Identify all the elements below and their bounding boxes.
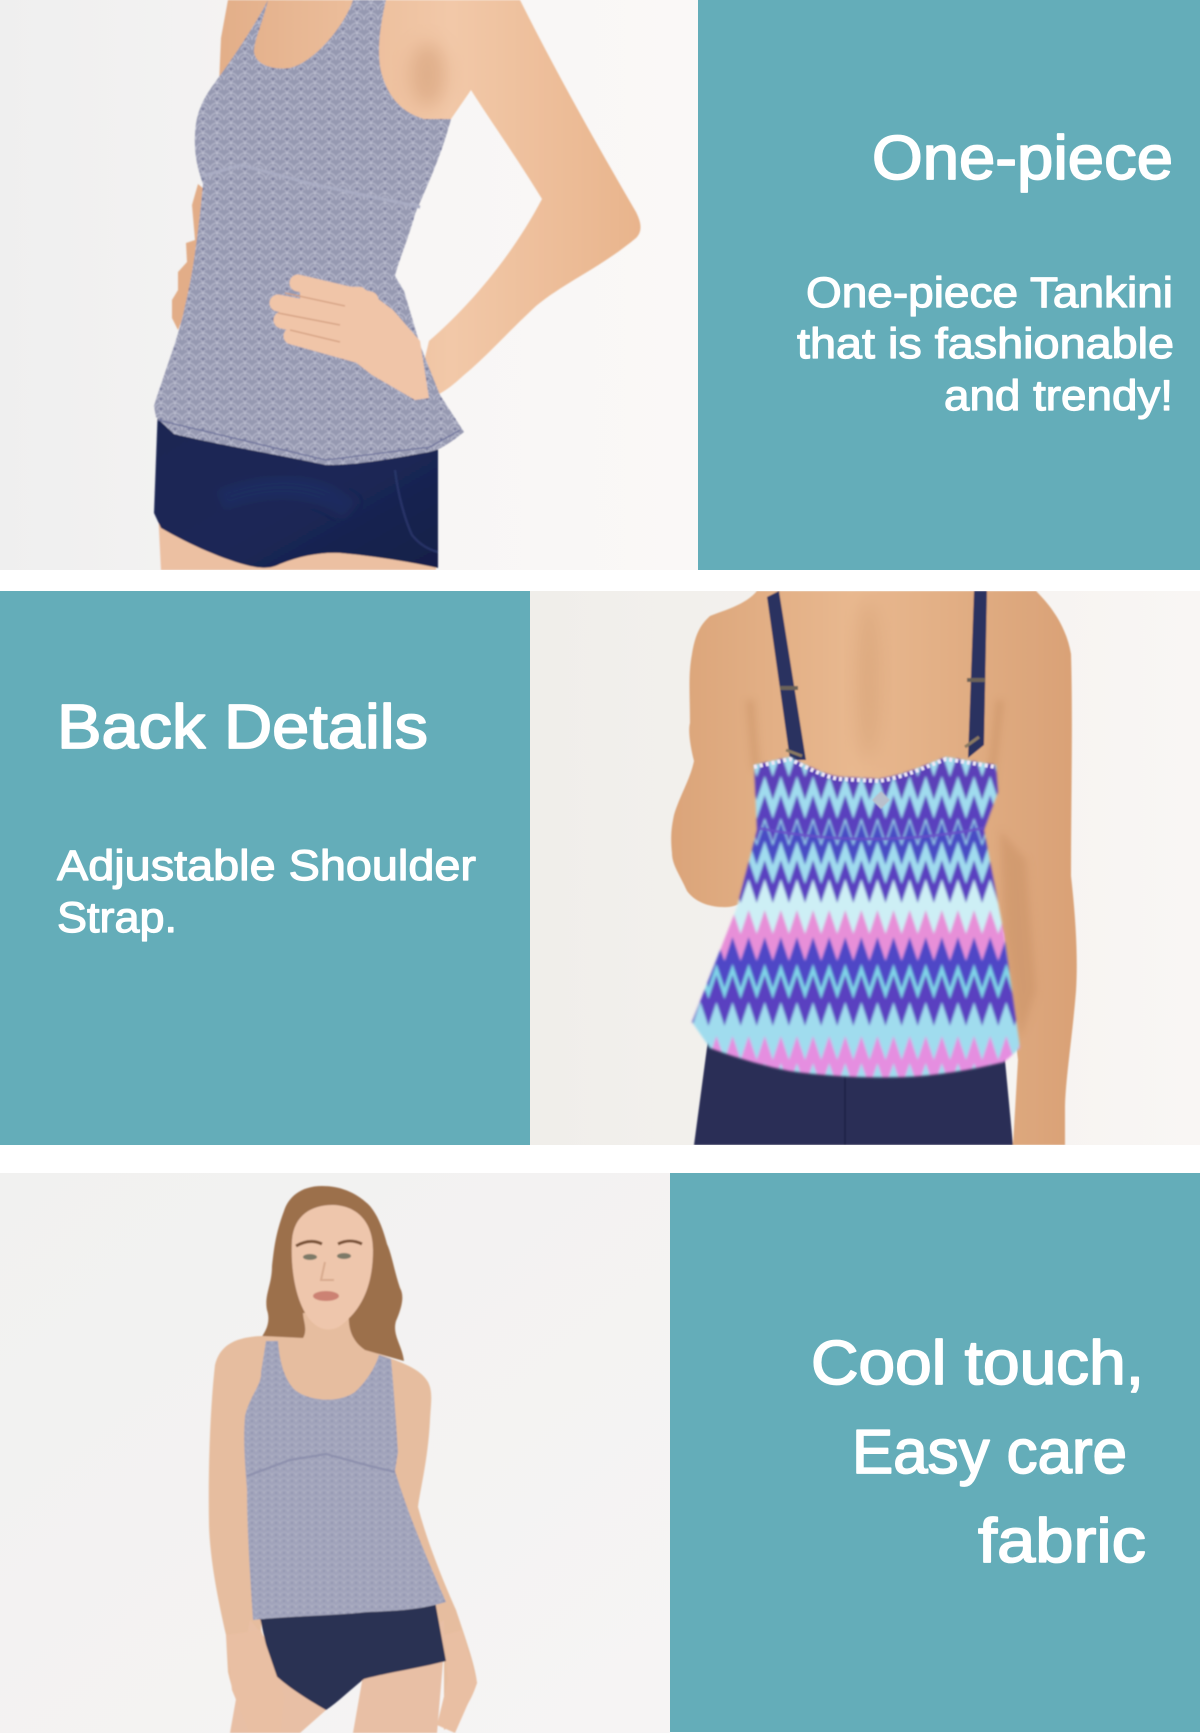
legs <box>230 1634 445 1733</box>
heading: cool touch, easy care fabric: Cool touch, <box>811 1329 1144 1398</box>
model's near shoulder, arm and neck skin <box>219 0 640 400</box>
heading: cool touch, easy care fabric: fabric <box>978 1507 1146 1576</box>
hands <box>231 1631 278 1698</box>
panel: back details photo <box>530 591 1200 1145</box>
text block: one-piece description: that is fashionable <box>797 320 1174 368</box>
heading: cool touch, easy care fabric <box>811 1329 1146 1576</box>
text block: back details description <box>57 842 476 942</box>
panel: one-piece photo <box>0 0 698 570</box>
text block: back details description: Strap. <box>57 894 177 942</box>
text block: one-piece description <box>797 269 1174 420</box>
navy shoulder straps with buckles <box>767 591 987 760</box>
legs <box>158 522 438 570</box>
heading: one-piece: One-piece <box>872 124 1173 193</box>
face <box>292 1205 373 1330</box>
navy shorts <box>694 1040 1013 1145</box>
hair <box>258 1186 404 1361</box>
arms and shoulders <box>209 1313 477 1730</box>
logo diamond <box>872 791 890 809</box>
model's back and arms <box>671 591 1077 1145</box>
hand on hip <box>278 283 429 400</box>
heading: back details: Back Details <box>57 693 428 762</box>
heading: cool touch, easy care fabric: Easy care <box>852 1418 1127 1487</box>
navy shorts <box>260 1604 447 1711</box>
panel: one-piece text <box>698 0 1200 570</box>
text block: one-piece description: and trendy! <box>944 372 1173 420</box>
panel: fabric text <box>670 1173 1200 1732</box>
grey patterned tankini top <box>244 1341 446 1620</box>
panel: fabric photo <box>0 1173 670 1733</box>
patterned tankini top <box>154 0 464 465</box>
zigzag patterned tankini top <box>692 757 1020 1077</box>
model's far arm and fingers <box>172 184 205 330</box>
panel: back details text <box>0 591 530 1145</box>
text block: back details description: Adjustable Shoulder <box>57 842 476 890</box>
navy shorts <box>154 405 438 568</box>
text block: one-piece description: One-piece Tankini <box>806 269 1173 317</box>
